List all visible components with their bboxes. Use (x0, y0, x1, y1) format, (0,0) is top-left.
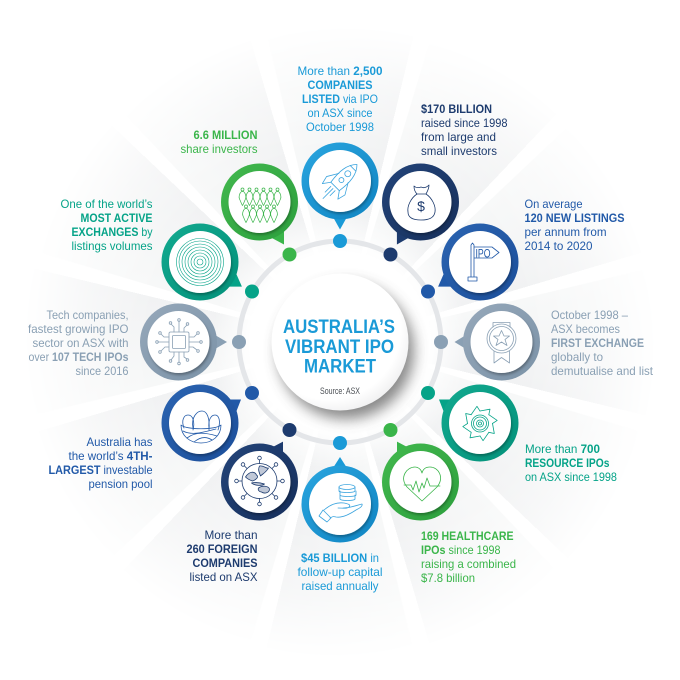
background rays (90, 92, 590, 592)
text: 120 new listings (524, 197, 624, 253)
text: 169 healthcare IPOs: 169 HEALTHCARE (421, 529, 514, 543)
text: tech companies: fastest growing IPO (28, 322, 128, 336)
icon: dollar sign: $ (417, 198, 425, 214)
text: 120 new listings: per annum from (524, 225, 607, 239)
central disc (272, 274, 408, 410)
text: first exchange: globally to (551, 350, 603, 364)
text: $170 billion: raised since 1998 (421, 116, 508, 130)
text: $170 billion: $170 BILLION (421, 102, 492, 116)
text: 2,500 companies (298, 64, 383, 134)
text: $45 billion: $45 BILLION in (301, 551, 379, 565)
bubble: microchip (140, 304, 227, 380)
icon label: IPO: IPO (476, 248, 491, 260)
icon: award medal (487, 322, 516, 363)
text: $170 billion: small investors (421, 144, 497, 158)
text: most active exchanges: One of the world’s (60, 197, 152, 211)
text: $45 billion: raised annually (302, 579, 378, 593)
text: first exchange (551, 308, 654, 378)
text: 6.6 million investors: share investors (180, 142, 258, 156)
text: 2,500 companies: LISTED via IPO (302, 92, 378, 106)
bubble: heart (382, 442, 459, 520)
text: 6.6 million investors: 6.6 MILLION (194, 128, 258, 142)
text: most active exchanges: listings volumes (72, 239, 152, 253)
text: tech companies: since 2016 (76, 364, 129, 378)
source note: Source: ASX (320, 386, 360, 396)
bubble: hand and coins (302, 457, 378, 542)
text: 120 new listings: 2014 to 2020 (524, 239, 593, 253)
text: first exchange: FIRST EXCHANGE (551, 336, 644, 350)
title: AUSTRALIA’S (283, 317, 395, 338)
icon: nest with eggs (181, 411, 221, 443)
ring dots (232, 234, 448, 450)
text: 260 foreign companies (186, 528, 258, 584)
text: 120 new listings: 120 NEW LISTINGS (524, 211, 624, 225)
text: tech companies: over 107 TECH IPOs (28, 350, 129, 364)
bubble: rocket (302, 142, 378, 230)
bubble: concentric rings (162, 224, 242, 300)
text: 4th-largest pension pool: the world’s 4TH- (68, 449, 152, 463)
icon: IPO flag (468, 243, 499, 281)
text: 260 foreign companies: 260 FOREIGN (186, 542, 258, 556)
icon: globe (235, 456, 284, 506)
text: most active exchanges: EXCHANGES by (71, 225, 152, 239)
text: 169 healthcare IPOs: raising a combined (421, 557, 516, 571)
text: 169 healthcare IPOs: $7.8 billion (421, 571, 475, 585)
text: tech companies (28, 308, 129, 378)
title: VIBRANT IPO (285, 337, 394, 358)
text: 2,500 companies: October 1998 (306, 120, 374, 134)
icon: heart pulse (404, 467, 441, 501)
text: 169 healthcare IPOs: IPOs since 1998 (421, 543, 501, 557)
text: $45 billion (298, 551, 382, 593)
text: 700 resource IPOs: More than 700 (525, 442, 600, 456)
text: 700 resource IPOs: RESOURCE IPOs (525, 456, 610, 470)
central disc shadow (278, 283, 414, 419)
text: $170 billion: from large and (421, 130, 496, 144)
bubble: award (454, 304, 540, 380)
text: 169 healthcare IPOs (421, 529, 516, 585)
icon: saw blade (463, 406, 497, 441)
text: 2,500 companies: on ASX since (308, 106, 373, 120)
bubble: globe (221, 442, 298, 520)
icon: money bag (408, 185, 435, 220)
bubble: nest (162, 384, 241, 462)
text: first exchange: ASX becomes (551, 322, 620, 336)
icon: microchip (156, 319, 202, 365)
text: first exchange: demutualise and list (551, 364, 654, 378)
text: $170 billion (421, 102, 508, 158)
inner glow (212, 214, 468, 470)
text: 4th-largest pension pool (48, 435, 153, 491)
text: 4th-largest pension pool: LARGEST investable (48, 463, 153, 477)
text: 2,500 companies: More than 2,500 (298, 64, 383, 78)
text: 120 new listings: On average (524, 197, 583, 211)
title: MARKET (304, 356, 376, 378)
text: tech companies: sector on ASX with (32, 336, 128, 350)
connecting ring (239, 241, 441, 443)
text: 6.6 million investors (180, 128, 258, 156)
title (283, 317, 395, 378)
text: first exchange: October 1998 – (551, 308, 628, 322)
text: 260 foreign companies: listed on ASX (190, 570, 258, 584)
text: $45 billion: follow-up capital (298, 565, 382, 579)
icon: crowd of people (239, 188, 281, 222)
text: 260 foreign companies: COMPANIES (192, 556, 258, 570)
text: tech companies: Tech companies, (46, 308, 128, 322)
icon: rocket (314, 155, 366, 208)
icon: concentric rings (176, 238, 224, 286)
text: 4th-largest pension pool: pension pool (88, 477, 152, 491)
text: 260 foreign companies: More than (204, 528, 258, 542)
bubble: saw blade (439, 384, 518, 462)
text: 700 resource IPOs: on ASX since 1998 (525, 470, 617, 484)
text: 2,500 companies: COMPANIES (308, 78, 372, 92)
bubble: IPO flag (438, 224, 518, 300)
bubble: money bag (382, 164, 459, 244)
bubble: investors (221, 164, 298, 244)
text: 4th-largest pension pool: Australia has (86, 435, 152, 449)
text: most active exchanges: MOST ACTIVE (80, 211, 152, 225)
text: most active exchanges (60, 197, 152, 253)
icon: hand and coins (319, 484, 362, 522)
text: 700 resource IPOs (525, 442, 617, 484)
